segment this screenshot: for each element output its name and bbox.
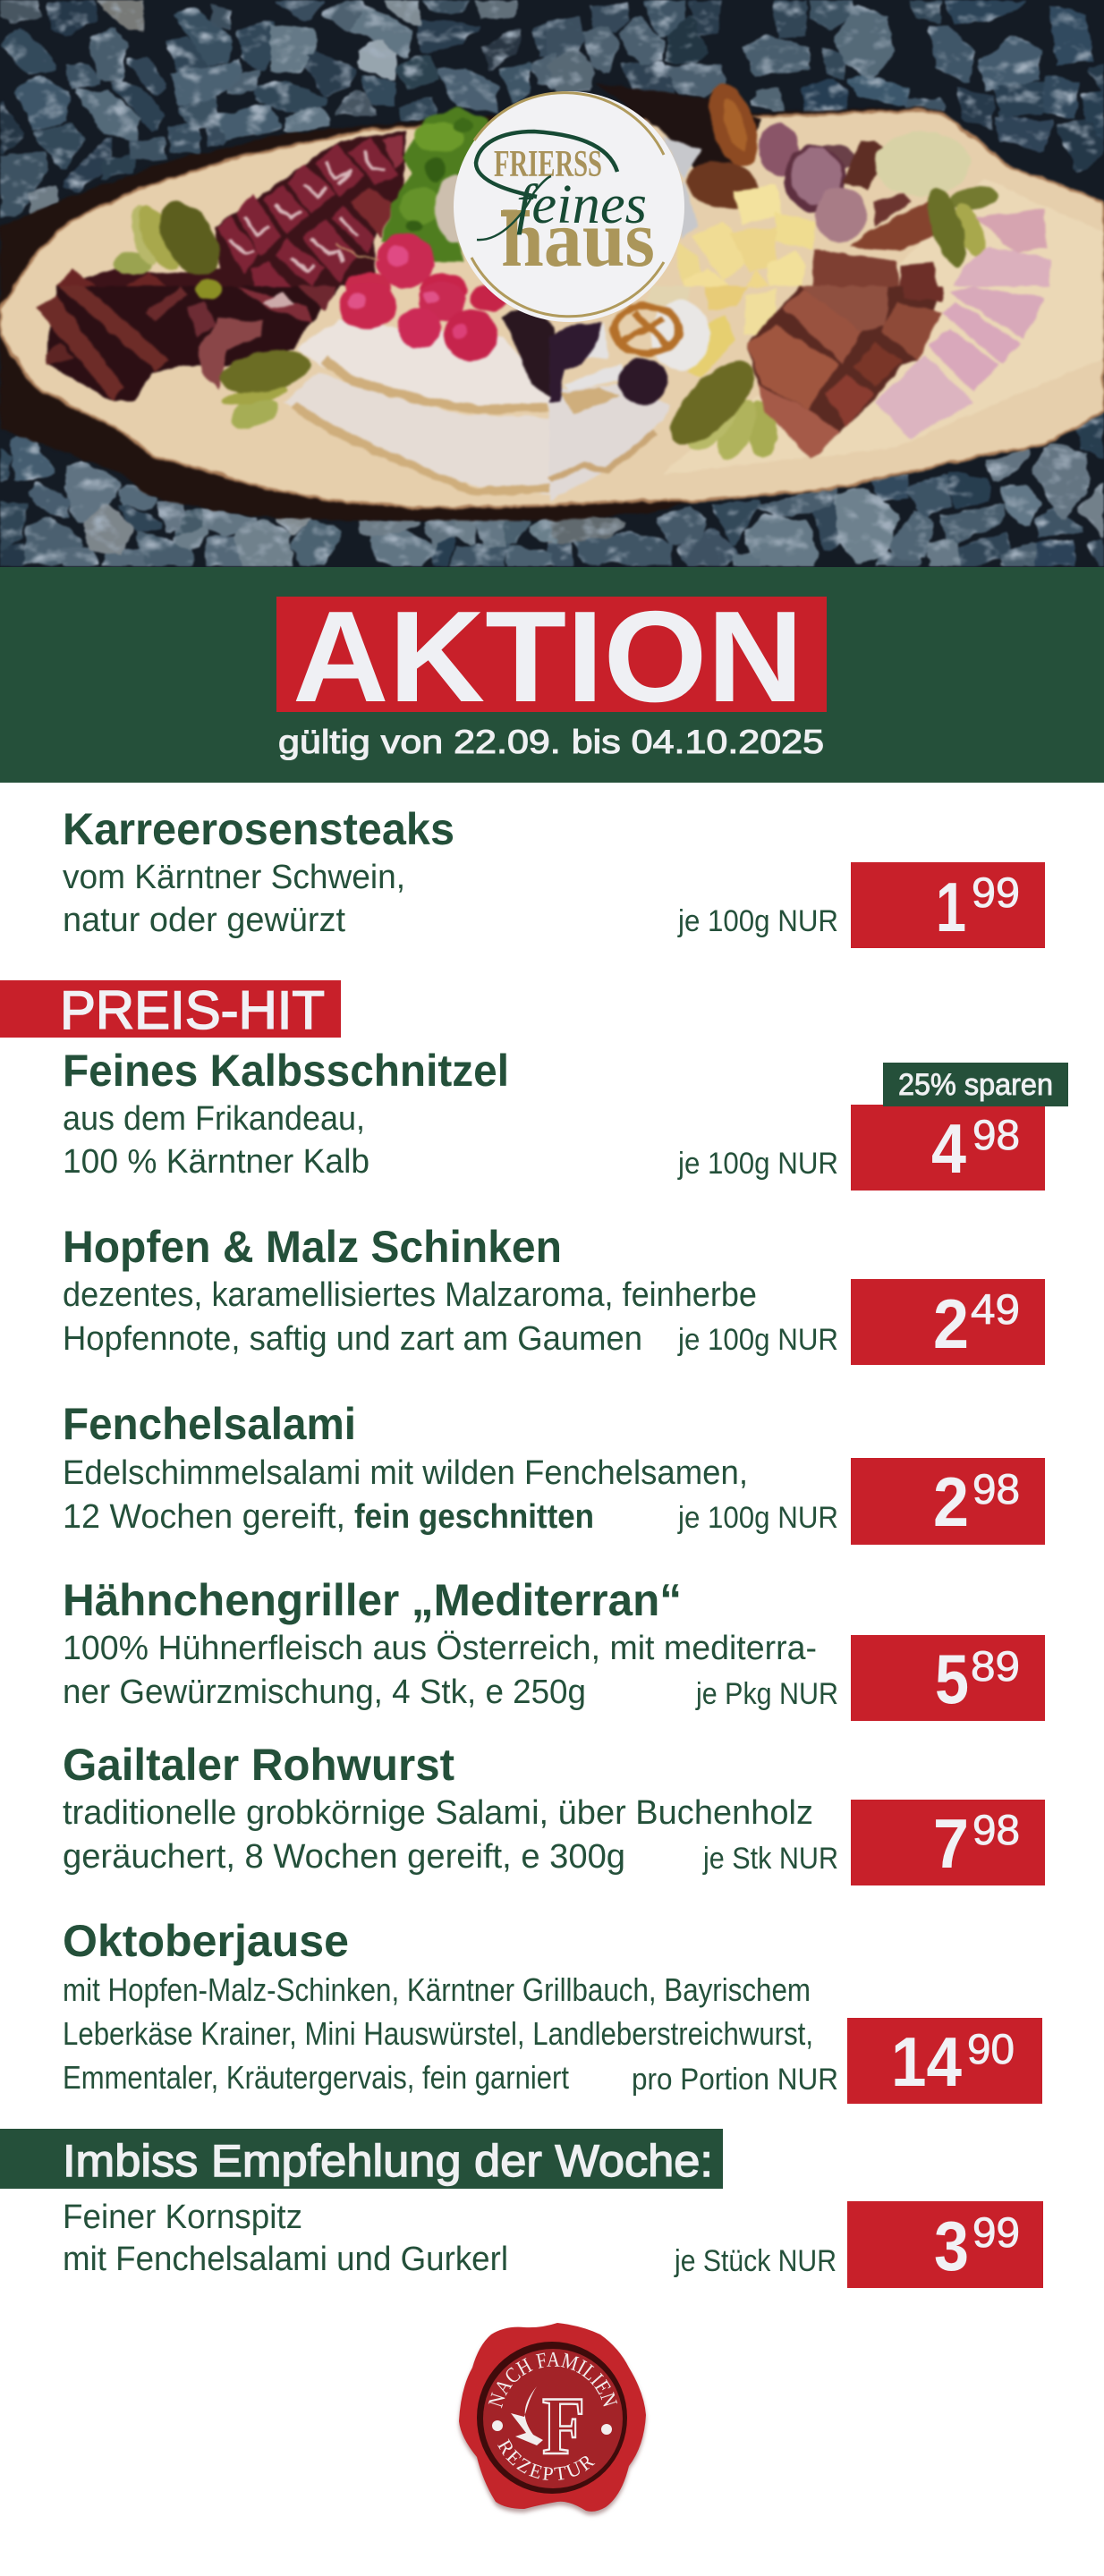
product: Hopfen & Malz Schinken: dezentes, karamellisiertes Malzaroma, feinherbe — [63, 1276, 757, 1314]
wax seal: Nach Familien Rezeptur: NACH FAMILIEN — [488, 2352, 617, 2408]
product: Fenchelsalami: 98 — [972, 1465, 1020, 1513]
product: Hopfen & Malz Schinken — [63, 1222, 1045, 1365]
logo swoosh — [476, 131, 617, 197]
product: Oktoberjause — [63, 1916, 1042, 2104]
cured meat left: coppa and salami sticks — [56, 131, 407, 286]
product: Feines Kalbsschnitzel: aus dem Frikandeau, — [63, 1100, 365, 1138]
product: Gailtaler Rohwurst: Gailtaler Rohwurst — [63, 1740, 454, 1790]
pickle mid — [225, 392, 284, 435]
AKTION badge: AKTION — [293, 584, 803, 729]
product: Gailtaler Rohwurst: geräuchert, 8 Wochen gereift, e 300g — [63, 1838, 625, 1876]
food right top: sausages, salami, cheese — [595, 80, 1051, 286]
product: Feines Kalbsschnitzel: 4 — [931, 1109, 966, 1188]
product: Feiner Kornspitz: 99 — [972, 2208, 1020, 2256]
product: Feines Kalbsschnitzel: 98 — [972, 1111, 1020, 1158]
product: Karreerosensteaks: Karreerosensteaks — [63, 804, 454, 854]
product: Oktoberjause: Emmentaler, Kräutergervais, fein garniert — [63, 2059, 569, 2096]
radishes — [339, 282, 506, 361]
cheese cubes — [676, 242, 701, 286]
green header band — [0, 567, 1104, 783]
leberkäse — [975, 208, 1047, 253]
product: Fenchelsalami: 12 Wochen gereift, — [63, 1498, 345, 1536]
product: Hähnchengriller Mediterran — [63, 1575, 1045, 1721]
gherkin left — [114, 252, 152, 275]
Imbiss banner: Imbiss Empfehlung der Woche: — [63, 2136, 713, 2186]
product: Hähnchengriller Mediterran: Hähnchengriller „Mediterran“ — [63, 1575, 682, 1625]
product: Karreerosensteaks: 1 — [936, 868, 966, 946]
product: Feiner Kornspitz: Feiner Kornspitz — [63, 2199, 302, 2236]
product: Oktoberjause: Leberkäse Krainer, Mini Hauswürstel, Landleberstreichwurst, — [63, 2015, 813, 2052]
wax seal: Nach Familien Rezeptur — [456, 2323, 649, 2518]
food right bottom: ham, pretzel, egg, gherkin — [549, 286, 1045, 501]
ham top — [813, 249, 899, 286]
product: Hopfen & Malz Schinken: je 100g NUR — [677, 1323, 838, 1357]
product: Feiner Kornspitz: 3 — [934, 2207, 969, 2285]
product: Karreerosensteaks: je 100g NUR — [677, 904, 838, 938]
product: Feines Kalbsschnitzel: je 100g NUR — [677, 1147, 838, 1181]
product: Feiner Kornspitz: mit Fenchelsalami und Gurkerl — [63, 2241, 508, 2278]
product: Fenchelsalami: 2 — [933, 1462, 969, 1541]
product: Fenchelsalami: Edelschimmelsalami mit wilden Fenchelsamen, — [63, 1454, 748, 1492]
gherkin right — [947, 184, 1000, 213]
product: Gailtaler Rohwurst: je Stk NUR — [702, 1842, 838, 1876]
product: Gailtaler Rohwurst: 7 — [933, 1804, 969, 1883]
product: Hähnchengriller Mediterran: 5 — [935, 1640, 969, 1718]
product: Gailtaler Rohwurst: 98 — [972, 1806, 1020, 1853]
product: Oktoberjause: 90 — [967, 2025, 1015, 2072]
logo word: FRIERSS: FRIERSS — [494, 144, 602, 185]
product: Fenchelsalami: fein geschnitten — [354, 1498, 594, 1536]
product: Hähnchengriller Mediterran: 100% Hühnerfleisch aus Österreich, mit mediterra- — [63, 1630, 817, 1667]
product: Karreerosensteaks: 99 — [972, 869, 1020, 916]
stones background — [0, 0, 1104, 566]
product: Hähnchengriller Mediterran: je Pkg NUR — [695, 1677, 838, 1711]
product: Gailtaler Rohwurst — [63, 1740, 1045, 1885]
product: Feines Kalbsschnitzel: Feines Kalbsschnitzel — [63, 1046, 509, 1096]
25% sparen tag: 25% sparen — [898, 1068, 1053, 1102]
product: Karreerosensteaks: vom Kärntner Schwein, — [63, 859, 405, 896]
PREIS-HIT banner: PREIS-HIT — [60, 980, 325, 1040]
product: Feines Kalbsschnitzel: 100 % Kärntner Kalb — [63, 1143, 369, 1181]
wax seal: Nach Familien Rezeptur: F — [542, 2380, 585, 2471]
wooden board with food — [0, 80, 1104, 521]
product: Karreerosensteaks: natur oder gewürzt — [63, 902, 345, 939]
product: Oktoberjause: Oktoberjause — [63, 1916, 349, 1966]
validity dates: gültig von 22.09. bis 04.10.2025 — [278, 724, 824, 760]
product: Feines Kalbsschnitzel — [63, 1046, 1068, 1191]
product: Feiner Kornspitz: je Stück NUR — [674, 2244, 836, 2278]
hero photo: charcuterie board on stones — [0, 0, 1104, 567]
lard slices — [283, 373, 555, 495]
logo: Frierss feines haus — [454, 91, 684, 322]
product: Gailtaler Rohwurst: traditionelle grobkörnige Salami, über Buchenholz — [63, 1794, 813, 1832]
product: Hopfen & Malz Schinken: 2 — [933, 1284, 969, 1363]
radishes top — [376, 234, 434, 288]
product: Oktoberjause: 14 — [891, 2022, 962, 2101]
bark rim — [0, 107, 948, 521]
product: Fenchelsalami: Fenchelsalami — [63, 1399, 356, 1449]
product: Hopfen & Malz Schinken: Hopfen & Malz Schinken — [63, 1222, 562, 1272]
product: Fenchelsalami — [63, 1399, 1045, 1545]
logo word: haus: haus — [501, 195, 655, 284]
logo word: feines: feines — [516, 174, 647, 235]
product: Hähnchengriller Mediterran: 89 — [971, 1642, 1020, 1690]
board wood — [0, 110, 1104, 508]
product: Oktoberjause: mit Hopfen-Malz-Schinken, Kärntner Grillbauch, Bayrischem — [63, 1971, 811, 2008]
product: Feiner Kornspitz — [63, 2199, 1043, 2288]
lettuce — [336, 107, 496, 302]
product: Hopfen & Malz Schinken: Hopfennote, saftig und zart am Gaumen — [63, 1320, 642, 1358]
product: Hopfen & Malz Schinken: 49 — [971, 1285, 1020, 1333]
wax seal: Nach Familien Rezeptur: REZEPTUR — [497, 2438, 596, 2480]
25% sparen tag — [883, 1063, 1068, 1106]
product: Fenchelsalami: je 100g NUR — [677, 1501, 838, 1535]
product: Oktoberjause: pro Portion NUR — [632, 2063, 838, 2097]
product: Hähnchengriller Mediterran: ner Gewürzmischung, 4 Stk, e 250g — [63, 1674, 586, 1711]
product: Karreerosensteaks — [63, 804, 1045, 948]
